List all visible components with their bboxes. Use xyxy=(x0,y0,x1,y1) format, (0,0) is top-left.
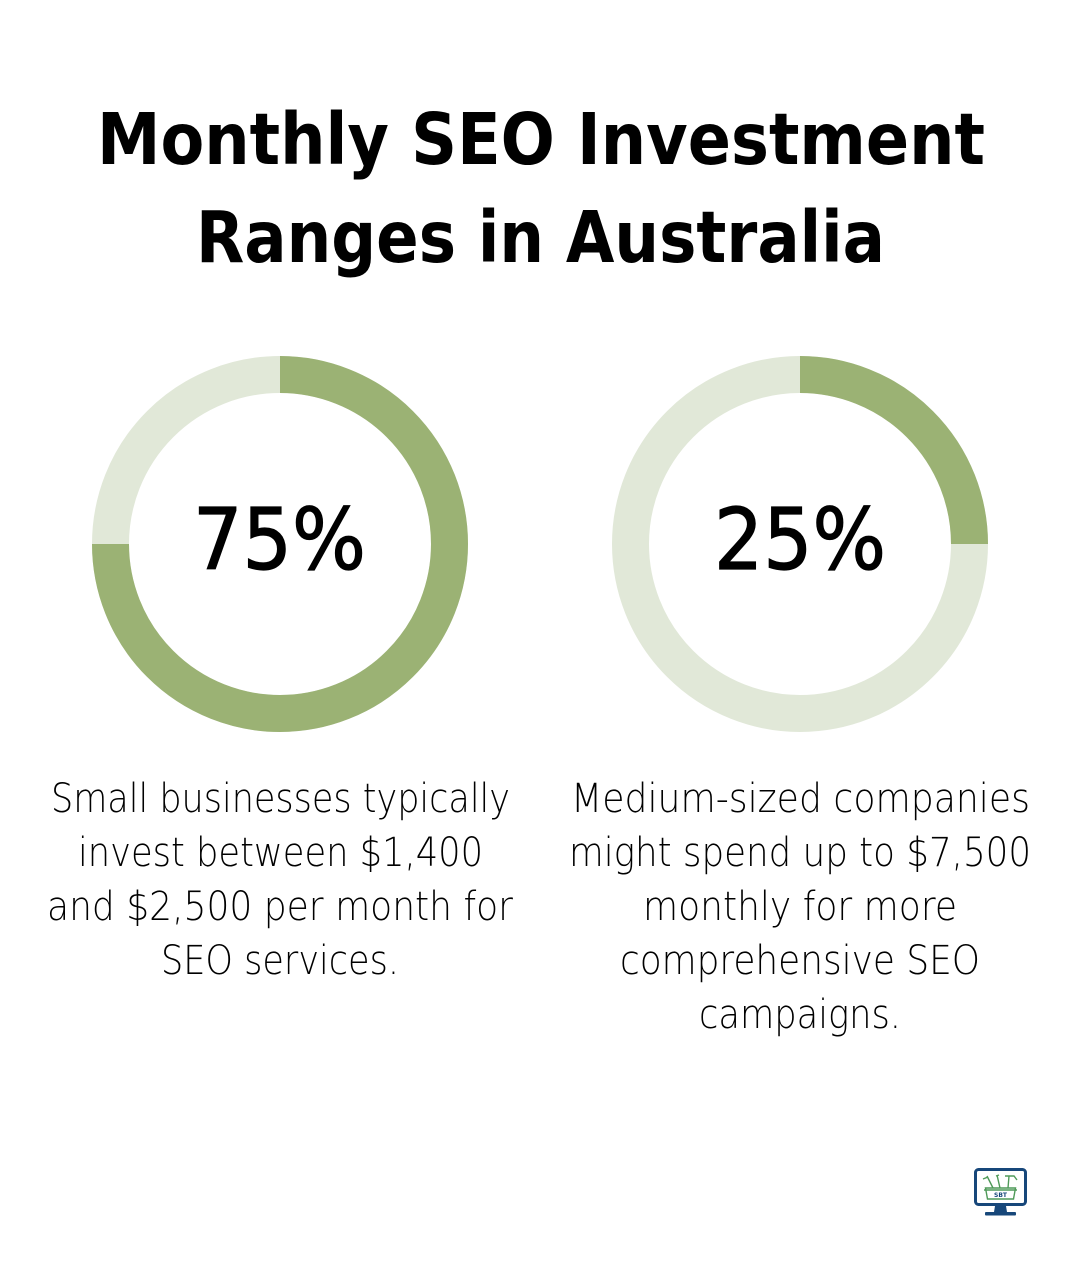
text block: medium-sized companies description: Medium-sized companies xyxy=(571,776,1030,822)
text block: small businesses description xyxy=(47,776,513,984)
donut chart: 75% xyxy=(110,374,450,714)
text block: medium-sized companies description: comprehensive SEO xyxy=(620,938,980,984)
text block: medium-sized companies description: might spend up to $7,500 xyxy=(569,830,1031,876)
title: Monthly SEO Investment xyxy=(97,98,985,181)
text block: medium-sized companies description: campaigns. xyxy=(699,992,901,1038)
text block: small businesses description: SEO services. xyxy=(161,938,399,984)
stat: 25%: 25% xyxy=(714,491,886,590)
icon: SBT monitor logo: SBT xyxy=(994,1192,1008,1199)
panel: small businesses xyxy=(47,374,513,984)
stat: 75%: 75% xyxy=(193,491,366,590)
donut chart: 25% xyxy=(630,374,970,714)
title: Ranges in Australia xyxy=(196,196,885,279)
text block: medium-sized companies description xyxy=(569,776,1031,1038)
text block: medium-sized companies description: monthly for more xyxy=(643,884,957,930)
panel: medium-sized companies xyxy=(569,374,1031,1038)
icon: SBT monitor logo xyxy=(976,1170,1026,1216)
text block: small businesses description: and $2,500 per month for xyxy=(47,884,513,930)
text block: small businesses description: Small businesses typically xyxy=(51,776,510,822)
text block: small businesses description: invest between $1,400 xyxy=(78,830,483,876)
title xyxy=(97,98,985,279)
